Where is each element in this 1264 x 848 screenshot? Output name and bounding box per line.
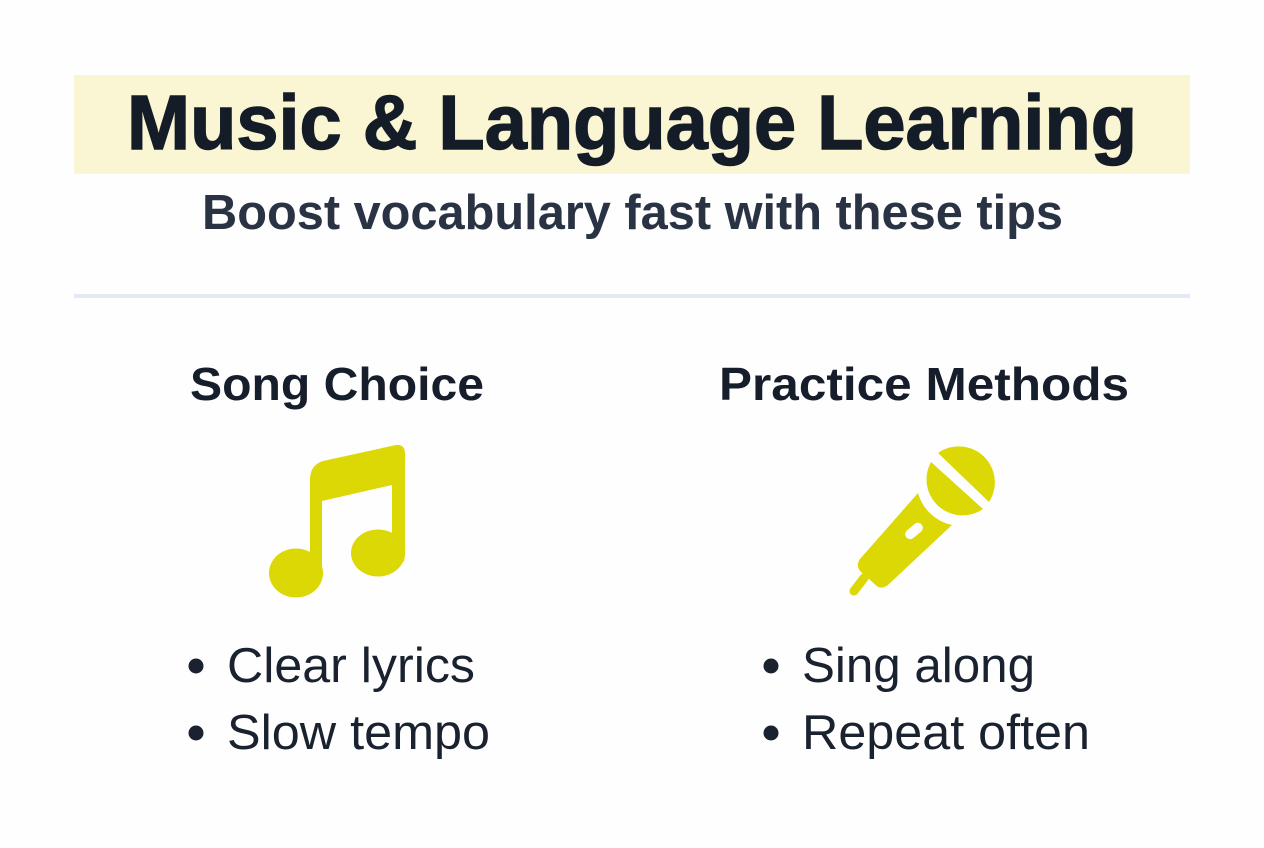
list: song choice tips: Clear lyrics (227, 639, 475, 693)
icon: microphone (854, 446, 995, 591)
panel: song choice (188, 358, 490, 760)
list: practice method tips (764, 639, 1090, 760)
title: Music & Language Learning (127, 80, 1137, 166)
subtitle: Boost vocabulary fast with these tips (202, 186, 1063, 240)
list: practice method tips: Repeat often (802, 706, 1090, 760)
list: song choice tips: Slow tempo (227, 706, 490, 760)
list: song choice tips (188, 639, 490, 760)
heading: song choice: Song Choice (190, 358, 484, 410)
icon: music note (269, 445, 405, 598)
title banner (74, 75, 1190, 174)
panel: practice methods (719, 358, 1129, 760)
list: practice method tips: Sing along (802, 639, 1035, 693)
heading: practice methods: Practice Methods (719, 358, 1129, 410)
